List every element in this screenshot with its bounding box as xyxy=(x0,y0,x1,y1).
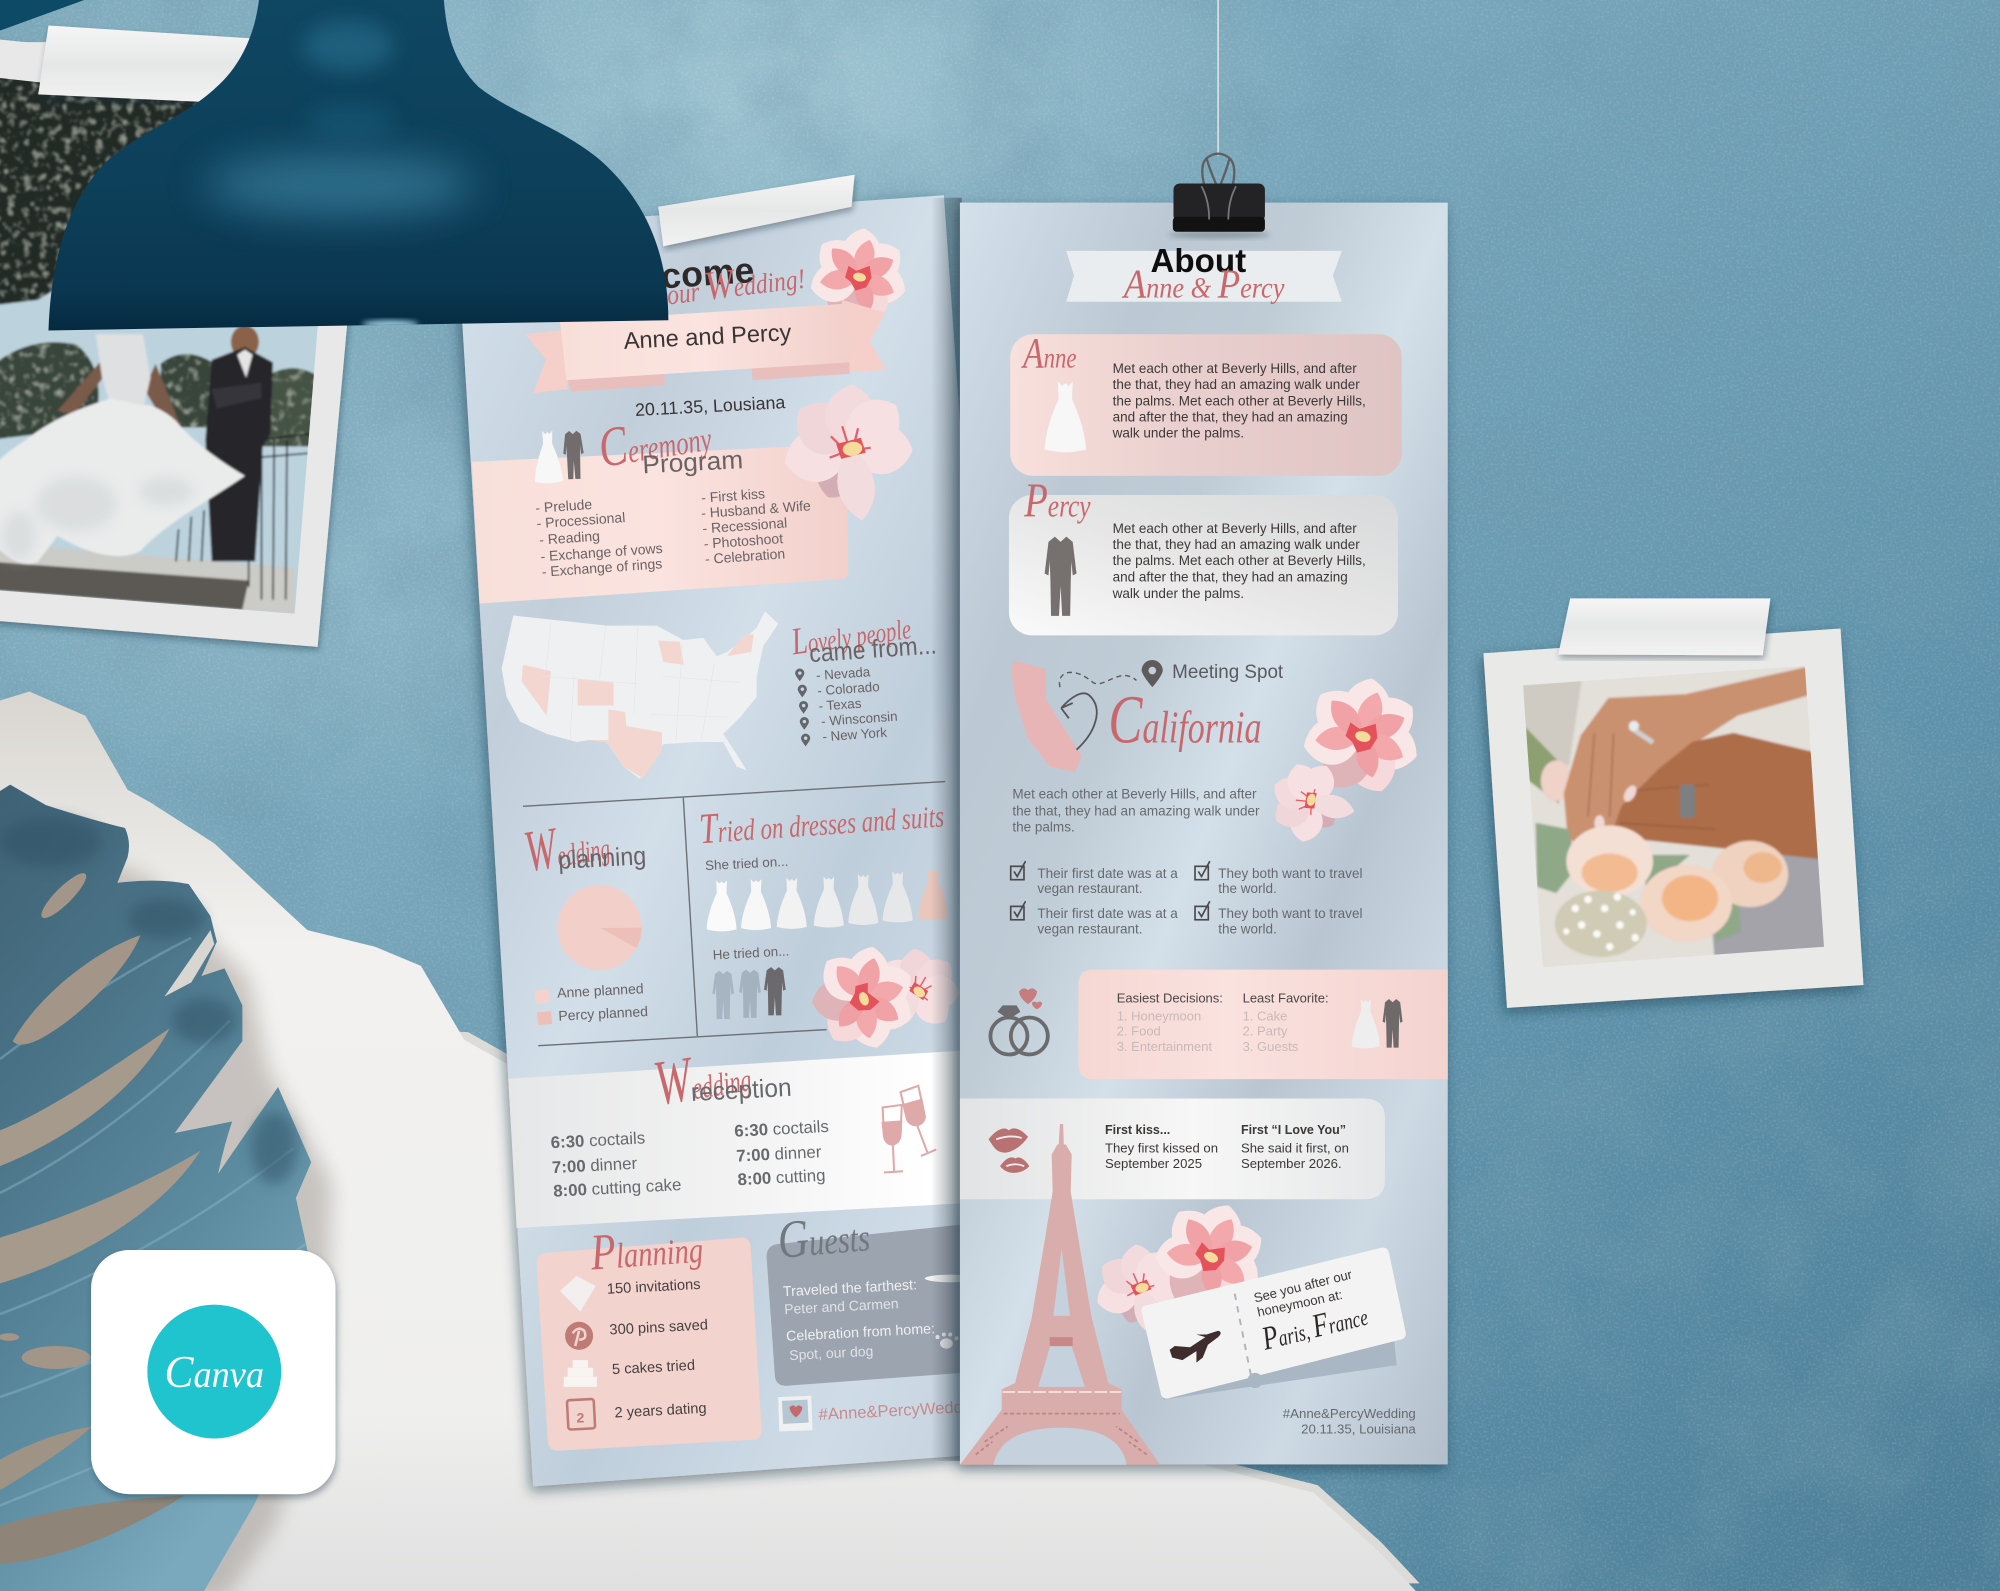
footer text xyxy=(1283,1406,1416,1436)
About banner xyxy=(1066,251,1342,302)
divider lines xyxy=(523,782,945,1046)
Percy script: Percy xyxy=(1023,475,1091,528)
reception word: reception xyxy=(690,1074,792,1107)
Meeting Spot label: Meeting Spot xyxy=(1172,662,1284,683)
footer text: #Anne&PercyWedding xyxy=(1283,1406,1416,1421)
tape strip behind xyxy=(0,42,48,74)
schedule right xyxy=(734,1117,829,1189)
first I love you text: September 2026. xyxy=(1241,1156,1342,1171)
flower side xyxy=(773,373,926,531)
Percy text: Met each other at Beverly Hills, and after xyxy=(1113,521,1357,536)
flower xyxy=(1285,662,1436,812)
origin list with pins: - Colorado xyxy=(817,679,880,698)
rings icon xyxy=(990,988,1048,1054)
California map xyxy=(1012,660,1082,772)
program list right: - Photoshoot xyxy=(703,530,784,552)
lips icon xyxy=(989,1128,1029,1173)
tape xyxy=(1558,598,1770,655)
highlighted states xyxy=(522,634,754,778)
pie legend xyxy=(534,980,648,1025)
origin list with pins: - Nevada xyxy=(815,664,871,683)
location pin xyxy=(1142,660,1163,687)
suit row xyxy=(712,967,786,1019)
pie legend: Anne planned xyxy=(557,980,644,1001)
planning stats: 150 invitations xyxy=(607,1277,701,1298)
Percy text: and after the that, they had an amazing xyxy=(1113,569,1348,584)
welcome heading: Welcome xyxy=(597,250,756,301)
pinterest icon xyxy=(565,1322,593,1350)
least favorite: 3. Guests xyxy=(1243,1039,1299,1054)
tape xyxy=(38,26,250,103)
program list left: - Prelude xyxy=(535,496,593,516)
sheet background xyxy=(960,203,1448,1464)
footer text: 20.11.35, Louisiana xyxy=(1301,1421,1416,1436)
meeting spot section xyxy=(1012,660,1436,854)
program heading: Program xyxy=(642,446,744,479)
sheet background xyxy=(457,195,1033,1486)
least favorite: Least Favorite: xyxy=(1243,990,1329,1005)
checklist: the world. xyxy=(1218,921,1277,936)
banner ribbon xyxy=(526,300,886,393)
photo frame xyxy=(1483,628,1864,1008)
least favorite xyxy=(1243,990,1329,1054)
small flower xyxy=(1259,751,1365,854)
flowers over ticket xyxy=(1083,1181,1285,1348)
wedding planning heading: Wedding xyxy=(520,807,613,884)
checklist: They both want to travel xyxy=(1218,866,1362,881)
dress icon xyxy=(1352,999,1380,1048)
guests panel xyxy=(767,1202,1033,1386)
schedule right: 7:00 dinner xyxy=(736,1142,822,1166)
photograph: hands and bouquet xyxy=(1523,666,1824,967)
planning stats xyxy=(607,1277,708,1421)
bride xyxy=(0,334,245,564)
dress icon xyxy=(533,430,563,484)
easiest decisions: 2. Food xyxy=(1117,1023,1161,1038)
photo frame xyxy=(0,38,370,647)
ticket text: See you after our xyxy=(1252,1266,1354,1306)
pie legend: Percy planned xyxy=(558,1003,648,1024)
planning stats: 2 years dating xyxy=(614,1401,707,1421)
easiest decisions: Easiest Decisions: xyxy=(1117,990,1223,1005)
origin list with pins: - Winsconsin xyxy=(821,709,898,729)
planning word: planning xyxy=(558,842,647,875)
schedule left: 8:00 cutting cake xyxy=(553,1175,682,1201)
schedule right: 8:00 cutting xyxy=(737,1166,826,1189)
ceremony script heading: Ceremony xyxy=(594,401,715,480)
flower bunch xyxy=(793,927,980,1067)
cake icon xyxy=(564,1360,597,1387)
suit icon xyxy=(562,431,585,479)
program list left xyxy=(535,496,663,580)
program list right: - Recessional xyxy=(702,514,788,536)
shadow from right sheet xyxy=(931,198,962,1461)
meeting paragraph: Met each other at Beverly Hills, and after xyxy=(1012,787,1257,802)
program list left: - Exchange of vows xyxy=(540,540,663,564)
guests text: Spot, our dog xyxy=(789,1343,874,1363)
schedule left: 6:30 coctails xyxy=(550,1128,646,1152)
first I love you text: She said it first, on xyxy=(1241,1141,1349,1156)
envelope icon xyxy=(560,1276,596,1312)
panel: Anne xyxy=(1010,329,1402,476)
checklist: the world. xyxy=(1218,881,1277,896)
origin list with pins xyxy=(795,664,898,746)
guests heading: Guests xyxy=(775,1202,872,1270)
easiest decisions: 1. Honeymoon xyxy=(1117,1009,1201,1024)
least favorite: 1. Cake xyxy=(1243,1009,1287,1024)
guests text: Peter and Carmen xyxy=(784,1295,899,1317)
flower top xyxy=(796,217,918,338)
suit icon xyxy=(1383,999,1403,1048)
curved arrow xyxy=(1061,693,1097,750)
photograph xyxy=(0,78,318,614)
Anne text: walk under the palms. xyxy=(1112,426,1244,441)
plane icon xyxy=(1170,1331,1221,1363)
champagne glasses icon xyxy=(883,1086,936,1173)
reception script heading: Wedding xyxy=(649,1034,755,1119)
Percy text: the that, they had an amazing walk under xyxy=(1113,537,1360,552)
ticket xyxy=(1141,1248,1406,1400)
couple names: Anne and Percy xyxy=(623,320,792,355)
program list left: - Processional xyxy=(536,509,626,531)
suit icon xyxy=(1045,537,1077,616)
Percy text: walk under the palms. xyxy=(1112,586,1244,601)
US map xyxy=(502,611,778,779)
first kiss text: September 2025 xyxy=(1105,1156,1202,1171)
ticket text second line: honeymoon at: xyxy=(1256,1287,1344,1320)
wedding photo polaroid xyxy=(0,26,370,647)
Anne text: Met each other at Beverly Hills, and after xyxy=(1113,361,1357,376)
Canva wordmark: Canva xyxy=(165,1346,264,1397)
planning heading: Planning xyxy=(588,1218,705,1282)
meeting paragraph xyxy=(1012,787,1260,834)
Anne text: and after the that, they had an amazing xyxy=(1113,409,1348,424)
he tried on label: He tried on... xyxy=(712,943,790,962)
first I love you text: First “I Love You” xyxy=(1241,1123,1346,1137)
origin list with pins: - New York xyxy=(822,725,888,744)
dashed route xyxy=(1059,672,1136,687)
meeting paragraph: the that, they had an amazing walk under xyxy=(1012,803,1260,818)
date and place: 20.11.35, Lousiana xyxy=(634,392,786,420)
ceremony panel xyxy=(472,401,848,603)
right infographic sheet xyxy=(960,203,1448,1465)
program list right: - Celebration xyxy=(704,545,786,567)
rings photo polaroid xyxy=(1483,598,1864,1008)
torn white paper xyxy=(0,692,1420,1591)
calendar icon xyxy=(567,1399,595,1430)
Anne text: the palms. Met each other at Beverly Hills, xyxy=(1113,393,1366,408)
program list right xyxy=(701,485,811,567)
Canva app badge xyxy=(91,1250,335,1494)
panel: firsts xyxy=(960,1099,1385,1199)
polaroid heart icon xyxy=(778,1396,812,1432)
planning stats: 300 pins saved xyxy=(609,1317,708,1339)
Paris script: Paris, France xyxy=(1258,1296,1371,1358)
binder clip xyxy=(1168,154,1270,239)
she tried on label: She tried on... xyxy=(705,854,789,873)
checklist: vegan restaurant. xyxy=(1037,921,1143,936)
guests text xyxy=(783,1277,935,1363)
Percy text xyxy=(1112,521,1366,601)
Anne text: the that, they had an amazing walk under xyxy=(1113,377,1360,392)
first I love you text xyxy=(1241,1123,1349,1171)
panel: Percy xyxy=(1009,475,1398,635)
first kiss text: They first kissed on xyxy=(1105,1141,1218,1156)
script subtitle: to our Wedding! xyxy=(640,252,807,316)
groom xyxy=(205,325,273,561)
program list right: - First kiss xyxy=(701,485,765,506)
guests text: Traveled the farthest: xyxy=(783,1277,917,1300)
Anne text xyxy=(1112,361,1366,441)
tried on heading: Tried on dresses and suits xyxy=(698,788,945,853)
panel: decisions xyxy=(1078,970,1448,1079)
checklist: They both want to travel xyxy=(1218,906,1362,921)
easiest decisions: 3. Entertainment xyxy=(1117,1039,1212,1054)
program list left: - Exchange of rings xyxy=(541,555,663,580)
hanging lamp xyxy=(0,0,668,330)
reception band xyxy=(508,1034,1033,1228)
About heading: About xyxy=(1150,243,1246,280)
pie chart xyxy=(557,885,642,970)
guests text: Celebration from home: xyxy=(786,1321,935,1345)
plane icon xyxy=(925,1275,976,1282)
lovely people heading: Lovely people xyxy=(788,605,913,664)
calendar icon: 2 xyxy=(576,1410,584,1426)
program list right: - Husband & Wife xyxy=(701,497,811,521)
schedule left xyxy=(550,1128,682,1201)
names script: Anne & Percy xyxy=(1121,261,1285,306)
schedule right: 6:30 coctails xyxy=(734,1117,829,1141)
checklist xyxy=(1011,861,1362,936)
hashtag: #Anne&PercyWedding xyxy=(818,1396,985,1424)
least favorite: 2. Party xyxy=(1243,1023,1288,1038)
dress row xyxy=(707,869,948,931)
Anne script: Anne xyxy=(1021,329,1077,377)
dress icon xyxy=(1045,381,1086,452)
planning stats: 5 cakes tried xyxy=(612,1358,695,1378)
meeting paragraph: the palms. xyxy=(1012,819,1075,834)
left infographic sheet xyxy=(457,175,1033,1486)
first kiss text xyxy=(1105,1123,1218,1171)
checklist: Their first date was at a xyxy=(1037,866,1178,881)
tape on sheet xyxy=(658,175,855,246)
origin list with pins: - Texas xyxy=(818,696,862,714)
Eiffel tower xyxy=(960,1124,1160,1465)
checklist: Their first date was at a xyxy=(1037,906,1178,921)
planning panel xyxy=(537,1218,761,1451)
easiest decisions xyxy=(1117,990,1223,1054)
checklist: vegan restaurant. xyxy=(1037,881,1143,896)
program list left: - Reading xyxy=(539,528,600,548)
came from heading: came from... xyxy=(808,631,938,668)
paw icon xyxy=(935,1333,959,1349)
monstera leaf xyxy=(0,785,332,1591)
schedule left: 7:00 dinner xyxy=(552,1154,638,1177)
California script: California xyxy=(1108,682,1261,758)
Percy text: the palms. Met each other at Beverly Hills, xyxy=(1113,553,1366,568)
first kiss text: First kiss... xyxy=(1105,1123,1170,1137)
